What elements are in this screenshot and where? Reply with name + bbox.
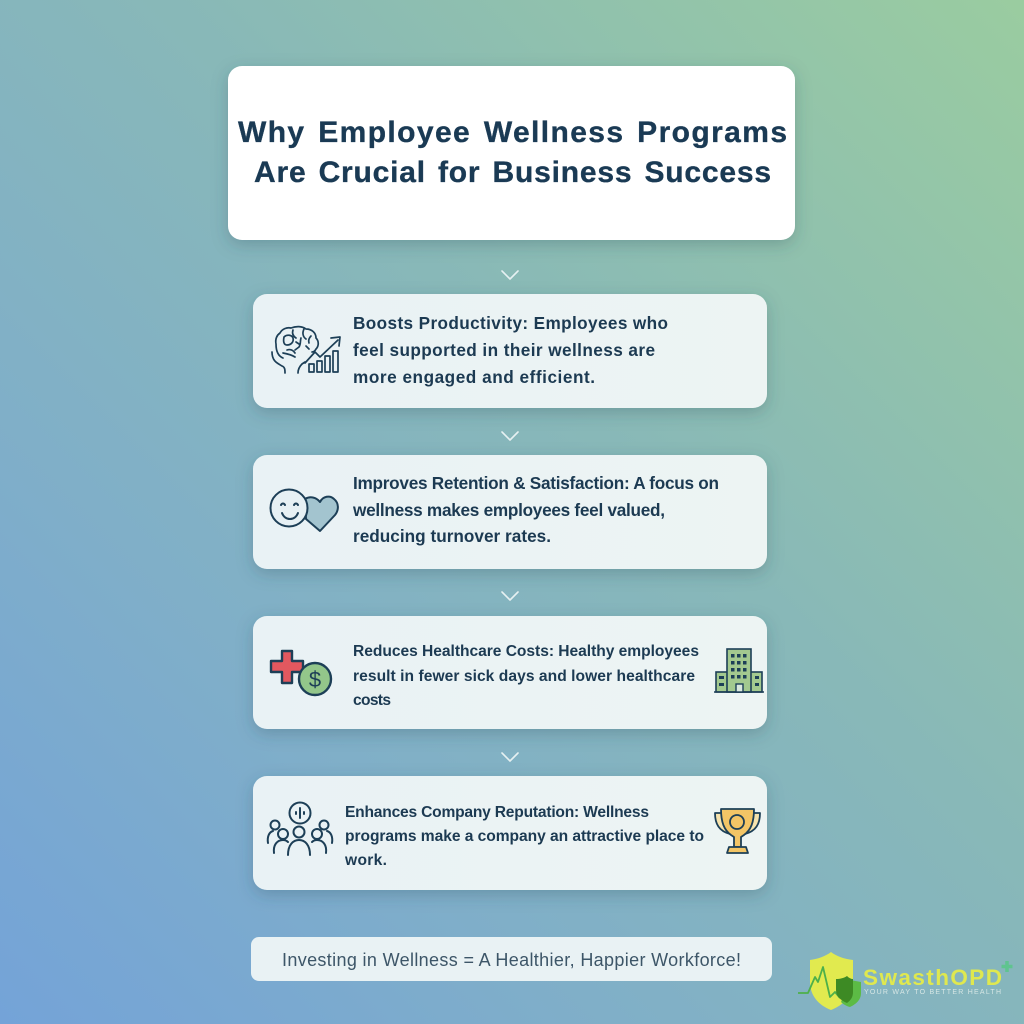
text: enhances company reputation: programs make a company an attractive place to — [345, 828, 704, 845]
title — [238, 116, 787, 189]
text: enhances company reputation: work. — [344, 852, 387, 869]
text: reduces healthcare costs: Reduces Healthcare Costs: Healthy employees — [353, 643, 699, 660]
arrow: card 1 to card 2 — [502, 432, 518, 440]
footer text: Investing in Wellness = A Healthier, Happier Workforce! — [282, 950, 741, 970]
text: improves retention: reducing turnover rates. — [353, 526, 551, 546]
title: Are Crucial for Business Success — [254, 156, 771, 189]
icon: group of people — [268, 802, 332, 855]
text: reduces healthcare costs: result in fewer sick days and lower healthcare — [353, 668, 695, 685]
icon: gold trophy — [715, 809, 760, 853]
text: reduces healthcare costs — [353, 643, 699, 709]
arrow: card 3 to card 4 — [502, 753, 518, 761]
logo: SwasthOPD — [798, 952, 1012, 1010]
arrow: card 2 to card 3 — [502, 592, 518, 600]
footer banner — [251, 937, 772, 981]
title: Why Employee Wellness Programs — [238, 116, 787, 149]
logo wordmark: SwasthOPD — [863, 965, 1002, 990]
text: boosts productivity — [353, 313, 668, 387]
panel: reduces healthcare costs — [253, 616, 767, 729]
text: boosts productivity: more engaged and efficient. — [353, 367, 595, 387]
arrow: title to card 1 — [502, 271, 518, 279]
panel: improves retention — [253, 455, 767, 569]
title panel — [228, 66, 795, 240]
icon: smiley and heart — [270, 490, 338, 531]
text: improves retention — [352, 473, 719, 546]
icon: plus — [1002, 961, 1012, 972]
text: improves retention: Improves Retention & Satisfaction: A focus on — [353, 473, 719, 493]
text: boosts productivity: Boosts Productivity: Employees who — [353, 313, 668, 333]
text: improves retention: wellness makes employees feel valued, — [352, 500, 665, 520]
icon: brain and growth chart — [272, 327, 340, 373]
panel: boosts productivity — [253, 294, 767, 408]
icon: medical cross and dollar: $ — [309, 667, 321, 692]
icon: office building — [714, 649, 764, 692]
text: enhances company reputation — [344, 804, 704, 869]
icon: medical cross and dollar — [271, 651, 331, 695]
text: reduces healthcare costs: costs — [353, 692, 391, 709]
text: boosts productivity: feel supported in their wellness are — [353, 340, 655, 360]
icon: shield with heartbeat — [798, 952, 861, 1010]
text: enhances company reputation: Enhances Company Reputation: Wellness — [345, 804, 649, 821]
panel: enhances company reputation — [253, 776, 767, 890]
logo tagline: YOUR WAY TO BETTER HEALTH — [864, 989, 1001, 996]
